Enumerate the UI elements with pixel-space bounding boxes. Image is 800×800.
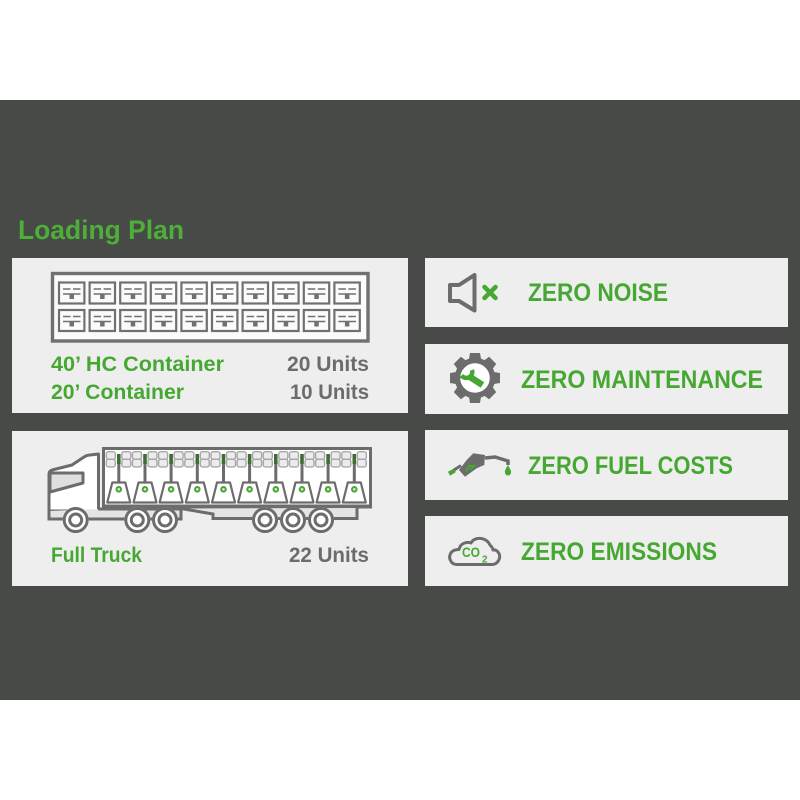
icon: CO2 cloud: CO <box>462 544 480 560</box>
dark background band <box>0 100 800 700</box>
heading: zero maintenance: ZERO MAINTENANCE <box>521 366 763 394</box>
truck cab <box>49 454 181 519</box>
icon: CO2 cloud: 2 <box>482 554 488 566</box>
icon: gear and wrench <box>450 353 500 403</box>
panel: zero maintenance <box>425 344 788 414</box>
icon: CO2 cloud <box>450 538 500 566</box>
value: 10 units: 10 Units <box>290 381 369 404</box>
trailer chassis <box>181 508 357 518</box>
panel: zero fuel costs <box>425 430 788 500</box>
wheels <box>63 507 334 533</box>
load of ten units <box>106 452 366 502</box>
container diagram <box>52 274 368 341</box>
truck diagram <box>49 448 372 533</box>
title: Loading Plan <box>18 215 184 245</box>
icon: muted speaker <box>450 275 496 310</box>
heading: zero fuel costs: ZERO FUEL COSTS <box>528 452 733 480</box>
label: 40' HC container: 40’ HC Container <box>51 353 224 376</box>
trailer body <box>104 448 370 506</box>
panel: container loading <box>12 258 408 413</box>
label: full truck: Full Truck <box>51 544 142 567</box>
icon: fuel nozzle <box>448 453 511 477</box>
value: 22 units: 22 Units <box>289 544 369 567</box>
label: 20' container: 20’ Container <box>51 381 184 404</box>
heading: zero noise: ZERO NOISE <box>528 279 668 307</box>
heading: zero emissions: ZERO EMISSIONS <box>521 538 717 566</box>
panel: truck loading <box>12 431 408 586</box>
panel: zero noise <box>425 258 788 327</box>
panel: zero emissions <box>425 516 788 586</box>
value: 20 units: 20 Units <box>287 353 369 376</box>
